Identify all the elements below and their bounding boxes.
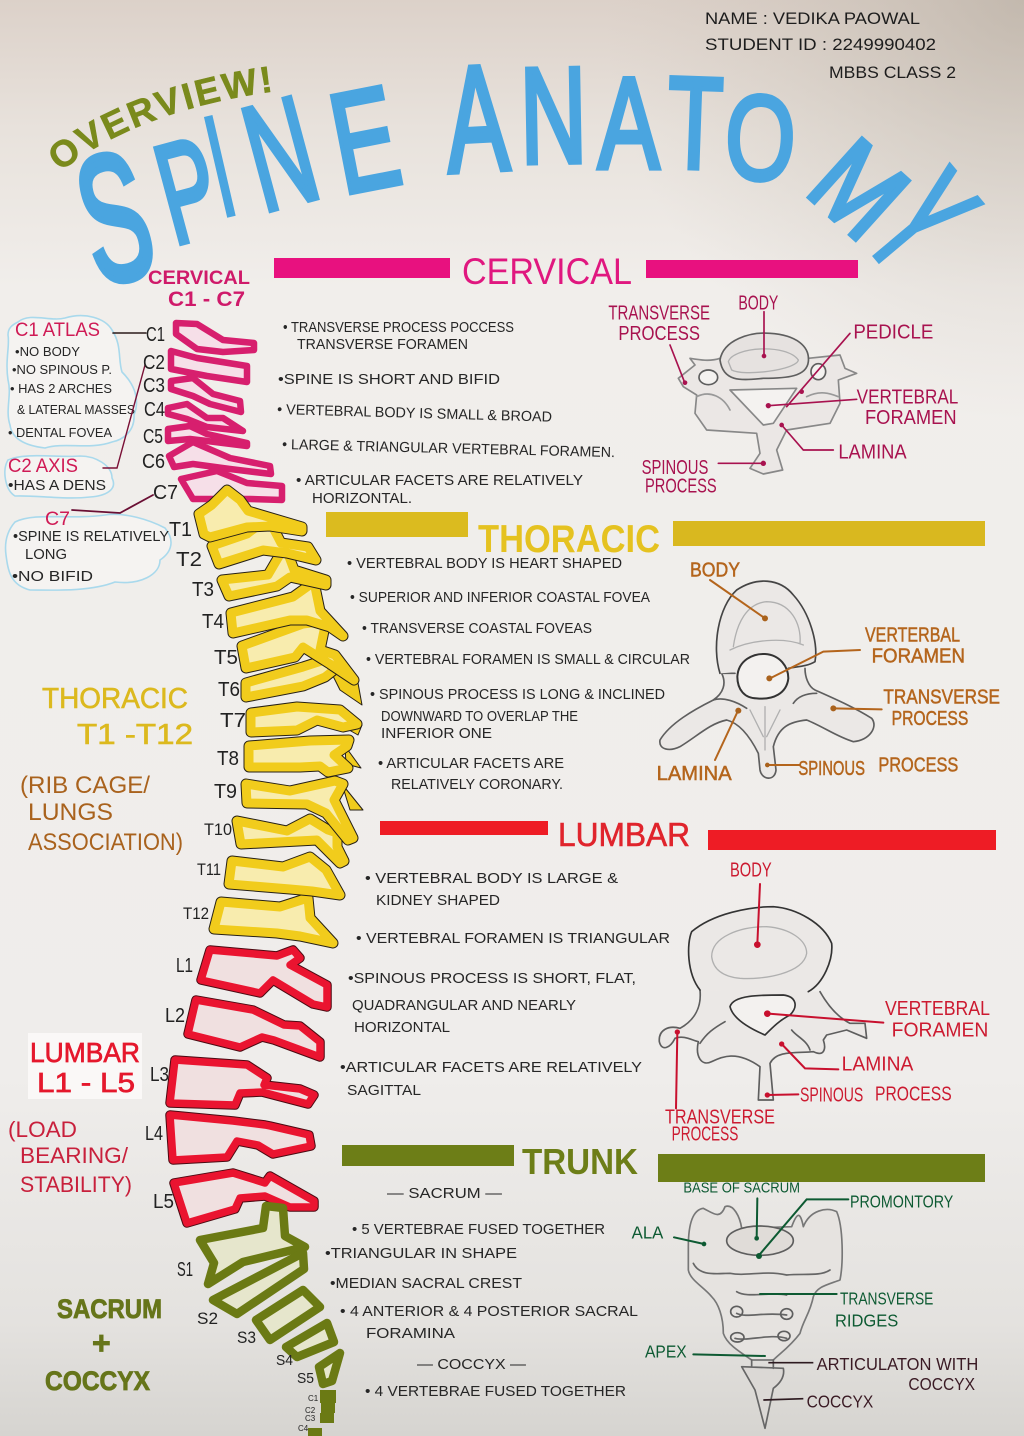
left label: thoracic: (RIB CAGE/ — [20, 772, 150, 799]
student details: MBBS CLASS 2 — [829, 63, 956, 82]
vertebra level labels: T11 — [197, 860, 221, 879]
vertebra level labels: C4 — [144, 399, 165, 421]
left label: cervical — [148, 268, 250, 311]
diagram: lumbar vertebra: FORAMEN — [892, 1019, 988, 1042]
left label: thoracic: ASSOCIATION) — [28, 829, 183, 856]
cervical notes: • VERTEBRAL BODY IS SMALL & BROAD — [277, 402, 552, 426]
lumbar notes: •SPINOUS PROCESS IS SHORT, FLAT, — [348, 971, 636, 987]
thoracic notes — [347, 556, 690, 793]
diagram: sacrum and coccyx: ALA — [632, 1222, 663, 1242]
trunk notes: • 4 ANTERIOR & 4 POSTERIOR SACRAL — [340, 1304, 638, 1320]
left label: cervical: CERVICAL — [148, 268, 250, 289]
diagram: cervical vertebra: SPINOUS — [642, 457, 708, 479]
title: spine anatomy: A — [598, 50, 659, 196]
student details: STUDENT ID : 2249990402 — [705, 35, 936, 54]
title: spine anatomy: N — [519, 39, 588, 192]
vertebra level labels: S5 — [297, 1370, 314, 1387]
cloud: C7: C7 — [45, 509, 70, 530]
vertebra level labels: S4 — [276, 1352, 293, 1369]
diagram: lumbar vertebra: LAMINA — [842, 1053, 914, 1076]
vertebra level labels: C2 — [305, 1406, 316, 1415]
left label: lumbar — [8, 1033, 142, 1197]
vertebra level labels: T12 — [183, 904, 209, 923]
left label: lumbar: (LOAD — [8, 1117, 77, 1142]
thoracic heading with bars — [326, 512, 985, 561]
title: spine anatomy: T — [665, 50, 725, 197]
lumbar heading with bars: LUMBAR — [558, 816, 690, 853]
trunk notes: — COCCYX — — [417, 1357, 527, 1373]
diagram: sacrum and coccyx: BASE OF SACRUM — [683, 1181, 800, 1197]
trunk notes: •TRIANGULAR IN SHAPE — [325, 1246, 517, 1262]
lumbar notes: • VERTEBRAL FORAMEN IS TRIANGULAR — [356, 931, 670, 947]
diagram: sacrum and coccyx: RIDGES — [835, 1311, 898, 1331]
overview heading: OVERVIEW! — [50, 66, 270, 167]
vertebra level labels: C2 — [143, 352, 165, 374]
diagram: cervical vertebra: PEDICLE — [853, 321, 933, 343]
title: spine anatomy — [59, 34, 1008, 323]
diagram: lumbar vertebra: VERTEBRAL — [885, 997, 990, 1020]
cervical notes — [277, 320, 615, 507]
cervical notes: • LARGE & TRIANGULAR VERTEBRAL FORAMEN. — [282, 437, 615, 461]
cloud: C1 atlas: •NO BODY — [15, 345, 81, 359]
trunk notes: • 4 VERTEBRAE FUSED TOGETHER — [365, 1384, 626, 1400]
vertebra level labels: L2 — [165, 1005, 185, 1027]
left label: sacrum + coccyx: SACRUM — [57, 1294, 162, 1324]
left label: thoracic: T1 -T12 — [77, 719, 193, 751]
title: spine anatomy: A — [442, 34, 512, 205]
leader lines to C1, C2, C7 — [72, 333, 153, 513]
vertebra level labels: L4 — [145, 1123, 163, 1145]
title: spine anatomy: N — [228, 66, 333, 244]
thoracic notes: • ARTICULAR FACETS ARE — [378, 756, 564, 772]
lumbar notes: • VERTEBRAL BODY IS LARGE & — [365, 871, 618, 887]
vertebra level labels: T8 — [217, 748, 239, 770]
left label: lumbar: LUMBAR — [30, 1037, 140, 1068]
left label: lumbar: BEARING/ — [20, 1143, 129, 1168]
cloud: C1 atlas: C1 ATLAS — [15, 320, 100, 341]
thoracic notes: • TRANSVERSE COASTAL FOVEAS — [362, 621, 592, 637]
diagram: cervical vertebra: VERTEBRAL — [857, 386, 958, 408]
thoracic notes: • VERTEBRAL FORAMEN IS SMALL & CIRCULAR — [366, 652, 690, 668]
trunk notes: •MEDIAN SACRAL CREST — [330, 1276, 522, 1292]
title: spine anatomy: I — [193, 88, 247, 246]
vertebra level labels: T4 — [202, 611, 224, 633]
title: spine anatomy: E — [319, 56, 411, 224]
spine: thoracic transverse process tails — [320, 650, 363, 810]
cloud: C2 axis — [5, 456, 113, 498]
trunk notes: • 5 VERTEBRAE FUSED TOGETHER — [352, 1222, 605, 1238]
diagram: lumbar vertebra: PROCESS — [672, 1123, 738, 1146]
diagram: cervical vertebra: FORAMEN — [865, 407, 957, 429]
left label: sacrum + coccyx: COCCYX — [45, 1366, 150, 1396]
student details — [705, 9, 956, 82]
thoracic notes: • SPINOUS PROCESS IS LONG & INCLINED — [370, 687, 665, 703]
title: spine anatomy: S — [59, 112, 171, 323]
diagram: sacrum and coccyx: APEX — [645, 1341, 687, 1361]
trunk notes — [325, 1186, 638, 1400]
diagram: lumbar vertebra: TRANSVERSE — [665, 1105, 775, 1128]
diagram: sacrum and coccyx: COCCYX — [908, 1374, 975, 1394]
left label: thoracic: THORACIC — [42, 683, 188, 715]
cervical heading with bars — [274, 251, 858, 292]
diagram: thoracic vertebra: BODY — [690, 559, 740, 582]
vertebra level labels: L5 — [153, 1191, 174, 1213]
cloud: C7: •SPINE IS RELATIVELY — [13, 529, 169, 545]
thoracic notes: INFERIOR ONE — [381, 726, 492, 742]
cloud: C1 atlas: •NO SPINOUS P. — [12, 363, 112, 377]
left label: cervical: C1 - C7 — [168, 288, 245, 311]
student details: NAME : VEDIKA PAOWAL — [705, 9, 920, 28]
diagram: thoracic vertebra: TRANSVERSE — [883, 685, 1000, 708]
diagram: cervical vertebra: LAMINA — [838, 441, 907, 463]
cervical notes: • TRANSVERSE PROCESS POCCESS — [283, 320, 514, 336]
spine: sacrum and coccyx — [200, 1206, 340, 1436]
cloud: C1 atlas: & LATERAL MASSES — [17, 403, 135, 417]
spine: thoracic vertebrae — [199, 490, 357, 943]
thoracic notes: RELATIVELY CORONARY. — [391, 777, 563, 793]
left label: lumbar: L1 - L5 — [37, 1067, 135, 1098]
lumbar notes: HORIZONTAL — [354, 1020, 450, 1036]
title: spine anatomy: O — [723, 71, 798, 206]
vertebra level labels: T2 — [176, 549, 202, 571]
diagram: lumbar vertebra: PROCESS — [875, 1083, 952, 1106]
cloud: C7: LONG — [25, 547, 67, 563]
left label: thoracic — [20, 683, 193, 856]
diagram: cervical vertebra — [608, 292, 958, 498]
vertebra level labels: C4 — [298, 1424, 309, 1433]
vertebra level labels: L3 — [150, 1064, 169, 1086]
diagram: thoracic vertebra — [657, 559, 1000, 785]
vertebra level labels: S2 — [197, 1309, 218, 1328]
vertebra level labels: T10 — [204, 820, 232, 839]
vertebra level labels: C5 — [143, 426, 163, 448]
cloud: C1 atlas: • DENTAL FOVEA — [8, 426, 113, 440]
cloud: C1 atlas — [7, 316, 137, 448]
title: spine anatomy: P — [141, 107, 235, 275]
lumbar notes — [340, 871, 670, 1099]
vertebra level labels: C1 — [146, 324, 165, 346]
diagram: thoracic vertebra: VERTERBAL — [865, 624, 960, 647]
vertebra level labels: C7 — [153, 482, 178, 504]
vertebra level labels: T9 — [214, 781, 237, 803]
thoracic notes: • SUPERIOR AND INFERIOR COASTAL FOVEA — [350, 590, 650, 606]
diagram: cervical vertebra: BODY — [738, 292, 778, 314]
diagram: thoracic vertebra: FORAMEN — [872, 645, 965, 668]
cloud: C2 axis: •HAS A DENS — [8, 478, 106, 494]
diagram: sacrum and coccyx — [632, 1181, 978, 1428]
diagram: thoracic vertebra: PROCESS — [878, 754, 958, 777]
diagram: sacrum and coccyx: PROMONTORY — [850, 1191, 953, 1211]
vertebra level labels: C3 — [143, 375, 165, 397]
diagram: thoracic vertebra: LAMINA — [657, 762, 732, 785]
cloud: C7 — [5, 509, 171, 590]
thoracic notes: • VERTEBRAL BODY IS HEART SHAPED — [347, 556, 622, 572]
diagram: cervical vertebra: PROCESS — [618, 323, 700, 345]
cervical notes: HORIZONTAL. — [312, 491, 412, 507]
vertebra level labels: T5 — [214, 647, 238, 669]
lumbar notes: KIDNEY SHAPED — [376, 893, 500, 909]
cervical heading with bars: CERVICAL — [462, 251, 632, 292]
cloud: C7: •NO BIFID — [12, 569, 93, 585]
left label: lumbar: STABILITY) — [20, 1172, 132, 1197]
vertebra level labels: S3 — [237, 1328, 256, 1347]
trunk heading with bars — [342, 1141, 985, 1182]
vertebra level labels: L1 — [176, 955, 193, 977]
spine: lumbar vertebrae — [170, 950, 327, 1223]
lumbar notes: QUADRANGULAR AND NEARLY — [352, 998, 576, 1014]
diagram: sacrum and coccyx: TRANSVERSE — [840, 1288, 933, 1308]
spine: cervical vertebrae — [168, 323, 282, 500]
cloud: C1 atlas: • HAS 2 ARCHES — [10, 382, 112, 396]
diagram: lumbar vertebra: SPINOUS — [800, 1084, 863, 1107]
vertebra level labels: T1 — [169, 519, 192, 541]
diagram: lumbar vertebra — [659, 859, 990, 1146]
trunk notes: — SACRUM — — [387, 1186, 503, 1202]
diagram: thoracic vertebra: PROCESS — [892, 707, 968, 730]
vertebra level labels: T3 — [192, 579, 214, 601]
vertebra level labels: T7 — [220, 710, 246, 732]
trunk notes: FORAMINA — [366, 1326, 455, 1342]
cervical notes: TRANSVERSE FORAMEN — [297, 337, 468, 353]
lumbar heading with bars — [380, 816, 996, 853]
diagram: thoracic vertebra: SPINOUS — [798, 757, 865, 780]
left label: thoracic: LUNGS — [28, 799, 113, 826]
title: spine anatomy: Y — [834, 143, 1008, 301]
vertebra level labels: S1 — [177, 1259, 193, 1281]
trunk heading with bars: TRUNK — [522, 1141, 638, 1182]
diagram: lumbar vertebra: BODY — [730, 859, 772, 882]
diagram: sacrum and coccyx: ARTICULATON WITH — [817, 1354, 978, 1374]
vertebra level labels — [142, 324, 319, 1433]
cervical notes: •SPINE IS SHORT AND BIFID — [278, 372, 500, 388]
diagram: cervical vertebra: TRANSVERSE — [608, 302, 710, 324]
vertebra level labels: C6 — [142, 451, 165, 473]
vertebra level labels: C1 — [308, 1394, 319, 1403]
diagram: sacrum and coccyx: COCCYX — [807, 1391, 874, 1411]
vertebra level labels: T6 — [218, 679, 240, 701]
lumbar notes: SAGITTAL — [347, 1083, 421, 1099]
thoracic notes: DOWNWARD TO OVERLAP THE — [381, 709, 578, 725]
left label: sacrum + coccyx: + — [92, 1325, 111, 1361]
cloud: C2 axis: C2 AXIS — [8, 456, 78, 477]
vertebra level labels: C3 — [305, 1414, 316, 1423]
diagram: cervical vertebra: PROCESS — [645, 476, 717, 498]
lumbar notes: •ARTICULAR FACETS ARE RELATIVELY — [340, 1060, 642, 1076]
title: spine anatomy: M — [786, 116, 930, 264]
thoracic heading with bars: THORACIC — [478, 518, 660, 561]
cervical notes: • ARTICULAR FACETS ARE RELATIVELY — [296, 473, 583, 489]
left label: sacrum + coccyx — [45, 1294, 162, 1396]
